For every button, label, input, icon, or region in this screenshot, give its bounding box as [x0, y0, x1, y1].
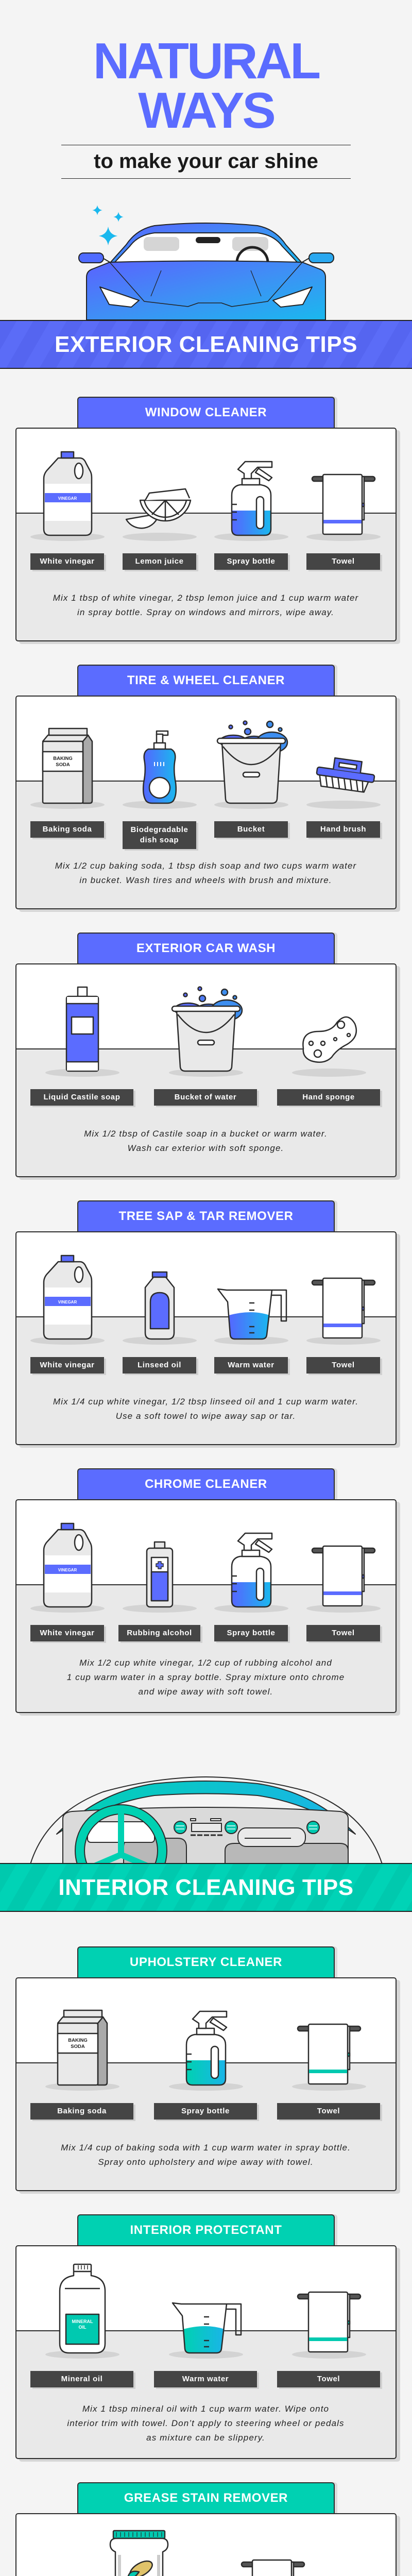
icon: baking soda box [58, 2010, 107, 2085]
label: Rubbing alcohol [118, 1625, 200, 1641]
subtitle: to make your car shine: to make your car shine [94, 150, 318, 173]
instructions: protectant: Mix 1 tbsp mineral oil with 1 cup warm water. Wipe onto [82, 2404, 329, 2414]
banner: exterior cleaning tips: EXTERIOR CLEANING TIPS [55, 332, 357, 357]
icon: towel teal [298, 2292, 360, 2352]
label: White vinegar: White vinegar [40, 557, 95, 566]
tab: chrome cleaner [77, 1468, 335, 1500]
icon: castile soap bottle [66, 987, 98, 1071]
icon: baking soda box: BAKING [53, 756, 73, 761]
instructions: tire and wheel: in bucket. Wash tires and wheels with brush and mixture. [79, 875, 332, 885]
icon: hand brush [315, 756, 376, 793]
section: upholstery cleaner [15, 1946, 400, 2194]
tab: tree sap and tar remover [77, 1200, 335, 1232]
tab: grease stain remover [77, 2482, 335, 2514]
instructions: car wash: Mix 1/2 tbsp of Castile soap in a bucket or warm water. [84, 1129, 328, 1139]
label: Spray bottle: Spray bottle [227, 557, 275, 566]
section: window cleaner [15, 397, 400, 644]
label: Lemon juice: Lemon juice [135, 557, 184, 566]
panel: upholstery cleaner [15, 1977, 397, 2191]
section: tree sap and tar remover [15, 1200, 400, 1448]
instructions: upholstery: Spray onto upholstery and wipe away with towel. [98, 2157, 314, 2167]
label: Mineral oil [30, 2371, 133, 2387]
label: White vinegar [30, 553, 104, 570]
panel: window cleaner [15, 428, 397, 641]
instructions: protectant: as mixture can be slippery. [146, 2433, 265, 2443]
label: Towel: Towel [317, 2375, 340, 2383]
label: Baking soda [30, 2103, 133, 2120]
label: White vinegar [30, 1625, 104, 1641]
label: Hand brush [306, 821, 380, 838]
label: Towel: Towel [317, 2107, 340, 2115]
illustration: blue car front [78, 205, 334, 320]
instructions: car wash [84, 1129, 328, 1153]
title: NATURAL WAYS: NATURAL [93, 32, 319, 89]
label: Baking soda [30, 821, 104, 838]
icon: dish soap [143, 731, 176, 803]
tab: exterior car wash [77, 933, 335, 964]
label: Bucket of water: Bucket of water [175, 1093, 236, 1101]
tab: interior protectant [77, 2214, 335, 2246]
section: tire and wheel cleaner [15, 665, 400, 912]
icon: measuring cup teal [173, 2303, 241, 2353]
title: NATURAL WAYS: WAYS [138, 82, 274, 139]
tab: grease stain remover: GREASE STAIN REMOVER [124, 2491, 288, 2505]
instructions: tree sap: Use a soft towel to wipe away sap or tar. [116, 1411, 296, 1421]
icon: mineral oil bottle: OIL [78, 2325, 87, 2330]
label: Towel [306, 553, 380, 570]
label: Bucket [214, 821, 288, 838]
label: Baking soda: Baking soda [57, 2107, 107, 2115]
label: White vinegar [30, 1357, 104, 1374]
label: Biodegradable dish soap [123, 821, 196, 849]
icon: vinegar jug: VINEGAR [58, 1300, 77, 1304]
banner: interior cleaning tips [0, 1863, 412, 1912]
icon: spray bottle [232, 1533, 272, 1607]
label: Warm water: Warm water [228, 1361, 274, 1369]
label: Spray bottle: Spray bottle [181, 2107, 230, 2115]
icon: baking soda box: SODA [56, 762, 70, 768]
icon: baking soda box [43, 728, 92, 803]
instructions: tree sap: Mix 1/4 cup white vinegar, 1/2 tbsp linseed oil and 1 cup warm water. [53, 1397, 358, 1406]
label: Hand sponge [277, 1089, 380, 1106]
icon: towel teal [298, 2024, 360, 2084]
label: Bucket of water [154, 1089, 257, 1106]
illustration: car interior dashboard [30, 1776, 382, 1863]
icon: corn starch jar [110, 2531, 168, 2576]
label: White vinegar: White vinegar [40, 1629, 95, 1637]
tab: tire and wheel cleaner: TIRE & WHEEL CLEANER [127, 673, 285, 687]
instructions: chrome: and wipe away with soft towel. [139, 1687, 273, 1697]
instructions: window cleaner: Mix 1 tbsp of white vinegar, 2 tbsp lemon juice and 1 cup warm water [53, 593, 358, 603]
icon: hand sponge [303, 1017, 356, 1062]
label: Warm water [214, 1357, 288, 1374]
instructions: protectant [67, 2404, 345, 2443]
icon: mineral oil bottle [60, 2264, 105, 2353]
icon: bucket with bubbles [217, 721, 287, 803]
label: Rubbing alcohol: Rubbing alcohol [127, 1629, 192, 1637]
label: Hand brush: Hand brush [320, 825, 366, 834]
icon: spray bottle teal [186, 2011, 227, 2085]
tab: tire and wheel cleaner [77, 665, 335, 697]
instructions: chrome: Mix 1/2 cup white vinegar, 1/2 cup of rubbing alcohol and [79, 1658, 332, 1668]
label: Towel [277, 2103, 380, 2120]
instructions: chrome [67, 1658, 345, 1697]
banner: interior cleaning tips: INTERIOR CLEANING TIPS [58, 1875, 354, 1900]
section: chrome cleaner [15, 1468, 400, 1716]
label: Linseed oil: Linseed oil [138, 1361, 181, 1369]
icon: towel [312, 1546, 375, 1606]
tab: interior protectant: INTERIOR PROTECTANT [130, 2223, 282, 2237]
label: Towel: Towel [332, 1361, 355, 1369]
panel: interior protectant [15, 2245, 397, 2459]
icon: baking soda box: BAKING [68, 2038, 88, 2043]
label: Spray bottle [154, 2103, 257, 2120]
instructions: window cleaner: in spray bottle. Spray on windows and mirrors, wipe away. [77, 607, 334, 617]
icon: sparkles [92, 205, 124, 245]
label: Hand sponge: Hand sponge [302, 1093, 355, 1101]
label: Towel [277, 2371, 380, 2387]
instructions: protectant: interior trim with towel. Don’t apply to steering wheel or pedals [67, 2418, 345, 2428]
tab: window cleaner [77, 397, 335, 429]
label: Linseed oil [123, 1357, 196, 1374]
panel: exterior car wash [15, 963, 397, 1177]
label: Towel [306, 1625, 380, 1641]
section: grease stain remover [15, 2482, 400, 2576]
label: Warm water: Warm water [182, 2375, 229, 2383]
label: Towel: Towel [332, 1629, 355, 1637]
label: Baking soda: Baking soda [43, 825, 92, 834]
icon: rubbing alcohol [147, 1542, 173, 1607]
instructions: chrome: 1 cup warm water in a spray bottle. Spray mixture onto chrome [67, 1672, 345, 1682]
tab: tree sap and tar remover: TREE SAP & TAR REMOVER [118, 1209, 294, 1223]
icon: spray bottle [232, 462, 272, 535]
label: Spray bottle: Spray bottle [227, 1629, 275, 1637]
icon: measuring cup [218, 1289, 286, 1339]
icon: baking soda box: SODA [71, 2044, 85, 2049]
icon: vinegar jug: VINEGAR [58, 1568, 77, 1572]
icon: towel teal [242, 2560, 304, 2576]
panel: tire and wheel cleaner [15, 696, 397, 909]
label: Liquid Castile soap: Liquid Castile soap [44, 1093, 120, 1101]
icon: linseed oil bottle [145, 1272, 174, 1339]
label: Spray bottle [214, 1625, 288, 1641]
label: Liquid Castile soap [30, 1089, 133, 1106]
label: Bucket: Bucket [237, 825, 265, 834]
label: Mineral oil: Mineral oil [61, 2375, 102, 2383]
instructions: window cleaner [53, 593, 358, 617]
label: Biodegradable dish soap: dish soap [140, 836, 179, 844]
tab: upholstery cleaner: UPHOLSTERY CLEANER [130, 1955, 282, 1969]
instructions: upholstery [61, 2143, 351, 2167]
icon: lemon slices [126, 489, 191, 531]
icon: mineral oil bottle: MINERAL [72, 2319, 93, 2324]
icon: vinegar jug [44, 1256, 92, 1339]
instructions: tree sap [53, 1397, 358, 1421]
icon: vinegar jug [44, 1523, 92, 1607]
tab: exterior car wash: EXTERIOR CAR WASH [136, 941, 276, 955]
label: Biodegradable dish soap: Biodegradable [131, 825, 188, 834]
label: Towel: Towel [332, 557, 355, 566]
instructions: upholstery: Mix 1/4 cup of baking soda with 1 cup warm water in spray bottle. [61, 2143, 351, 2153]
instructions: tire and wheel: Mix 1/2 cup baking soda, 1 tbsp dish soap and two cups warm water [55, 861, 356, 871]
label: Spray bottle [214, 553, 288, 570]
label: Warm water [154, 2371, 257, 2387]
instructions: car wash: Wash car exterior with soft sponge. [128, 1143, 284, 1153]
label: Lemon juice [123, 553, 196, 570]
label: Towel [306, 1357, 380, 1374]
tab: window cleaner: WINDOW CLEANER [145, 405, 267, 419]
section: interior protectant [15, 2214, 400, 2462]
icon: vinegar jug: VINEGAR [58, 496, 77, 501]
title: NATURAL WAYS [93, 32, 319, 139]
icon: bucket of water [172, 987, 242, 1071]
icon: towel [312, 1278, 375, 1338]
section: exterior car wash [15, 933, 400, 1180]
subtitle: to make your car shine [61, 145, 351, 179]
label: White vinegar: White vinegar [40, 1361, 95, 1369]
panel: chrome cleaner [15, 1499, 397, 1713]
instructions: tire and wheel [55, 861, 356, 885]
panel: grease stain remover [15, 2513, 397, 2576]
icon: towel [312, 474, 375, 534]
banner: exterior cleaning tips [0, 320, 412, 369]
icon: vinegar jug [44, 452, 92, 535]
panel: tree sap [15, 1231, 397, 1445]
tab: chrome cleaner: CHROME CLEANER [145, 1477, 267, 1491]
tab: upholstery cleaner [77, 1946, 335, 1978]
